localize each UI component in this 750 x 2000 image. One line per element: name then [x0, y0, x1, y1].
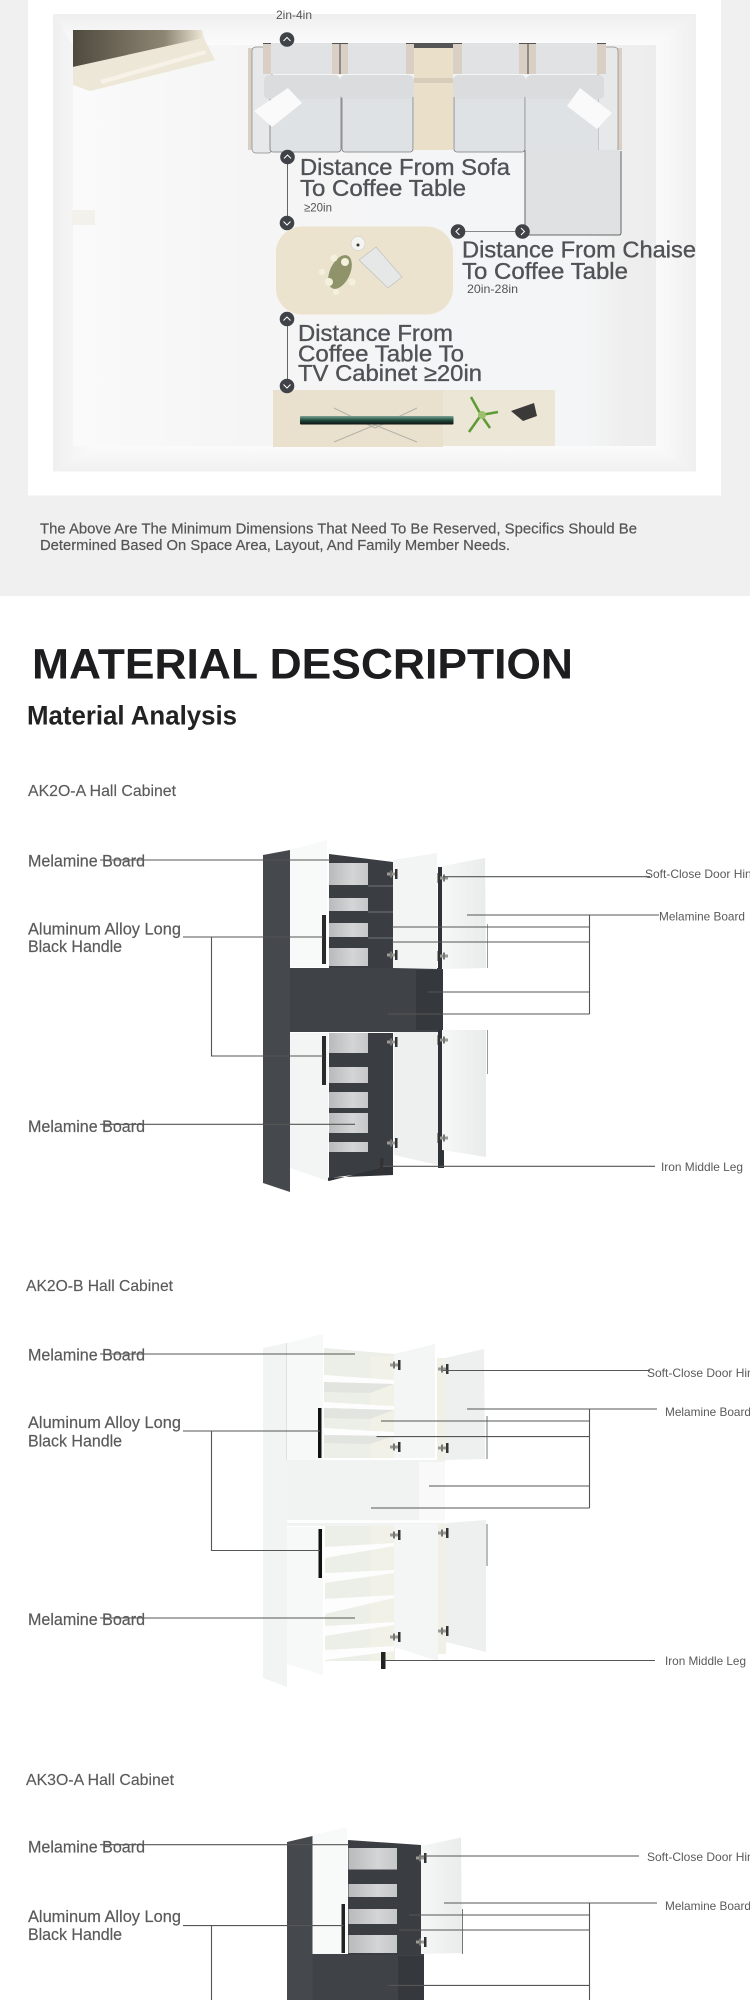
callout lines C — [100, 1845, 657, 2000]
left labels B: Melamine Board — [28, 1611, 145, 1629]
door at top left — [73, 30, 215, 91]
cabinet drawing B — [263, 1334, 487, 1687]
arrow: chaise to coffee table — [451, 224, 530, 239]
cabinet drawing C — [287, 1828, 462, 2000]
label: chaise to coffee table — [462, 236, 696, 296]
right labels A: Melamine Board — [659, 910, 745, 924]
left labels C — [28, 1838, 181, 1944]
label: sofa to coffee table: ≥20in — [304, 200, 332, 214]
left labels C: Black Handle — [28, 1926, 122, 1944]
right labels C — [647, 1850, 750, 1913]
heading: AK2O-B Hall Cabinet — [26, 1278, 174, 1295]
note text — [40, 522, 637, 554]
callout lines B — [100, 1354, 657, 1660]
left labels A — [28, 852, 181, 1136]
TV cabinet — [273, 390, 555, 447]
sectional sofa — [248, 43, 622, 235]
left labels B: Black Handle — [28, 1432, 122, 1450]
label: coffee table to TV cabinet: Coffee Table To — [298, 340, 464, 366]
callout lines A — [100, 860, 659, 1166]
cabinet drawing A — [263, 840, 488, 1192]
panel: AK20-A hall cabinet — [28, 783, 750, 1192]
right labels B — [647, 1366, 750, 1668]
title: MATERIAL DESCRIPTION — [32, 640, 573, 688]
panel: AK30-A hall cabinet — [26, 1772, 750, 2000]
label: chaise to coffee table: 20in-28in — [467, 282, 518, 296]
left labels A: Aluminum Alloy Long — [28, 920, 181, 938]
label: chaise to coffee table: To Coffee Table — [462, 258, 628, 284]
panel: AK20-B hall cabinet — [26, 1278, 750, 1687]
left labels A: Black Handle — [28, 938, 122, 956]
top section grey background — [0, 0, 750, 596]
label: coffee table to TV cabinet — [298, 320, 482, 386]
heading: AK2O-A Hall Cabinet — [28, 783, 177, 800]
right labels B: Iron Middle Leg — [665, 1654, 746, 1668]
left labels C: Aluminum Alloy Long — [28, 1908, 181, 1926]
right labels A — [645, 867, 750, 1174]
label: coffee table to TV cabinet: TV Cabinet ≥20in — [298, 360, 482, 386]
right labels A: Iron Middle Leg — [661, 1160, 743, 1174]
label: sofa to coffee table: Distance From Sofa — [300, 154, 510, 180]
panel: living room floor plan — [28, 0, 721, 496]
arrow: sofa depth top marker — [280, 32, 294, 47]
label: sofa to coffee table: To Coffee Table — [300, 175, 466, 201]
right labels C: Melamine Board — [665, 1899, 750, 1913]
left labels A: Melamine Board — [28, 852, 145, 870]
right labels B: Melamine Board — [665, 1405, 750, 1419]
left labels B — [28, 1346, 181, 1629]
label: sofa to coffee table — [300, 154, 510, 214]
room walls and floor — [53, 14, 696, 472]
label: chaise to coffee table: Distance From Chaise — [462, 236, 696, 262]
left labels B: Aluminum Alloy Long — [28, 1414, 181, 1432]
label: wall clearance: 2in-4in — [276, 8, 312, 22]
left labels A: Melamine Board — [28, 1118, 145, 1136]
left labels B: Melamine Board — [28, 1346, 145, 1364]
label: coffee table to TV cabinet: Distance From — [298, 320, 453, 346]
arrow: sofa to coffee table — [280, 150, 295, 230]
note text: The Above Are The Minimum Dimensions That Need To Be Reserved, Specifics Should Be — [40, 522, 637, 538]
arrow: coffee table to TV cabinet — [280, 312, 294, 393]
subtitle: Material Analysis — [27, 700, 237, 730]
coffee table — [276, 226, 453, 314]
left labels C: Melamine Board — [28, 1838, 145, 1856]
heading: AK3O-A Hall Cabinet — [26, 1772, 175, 1789]
note text: Determined Based On Space Area, Layout, And Family Member Needs. — [40, 538, 510, 554]
